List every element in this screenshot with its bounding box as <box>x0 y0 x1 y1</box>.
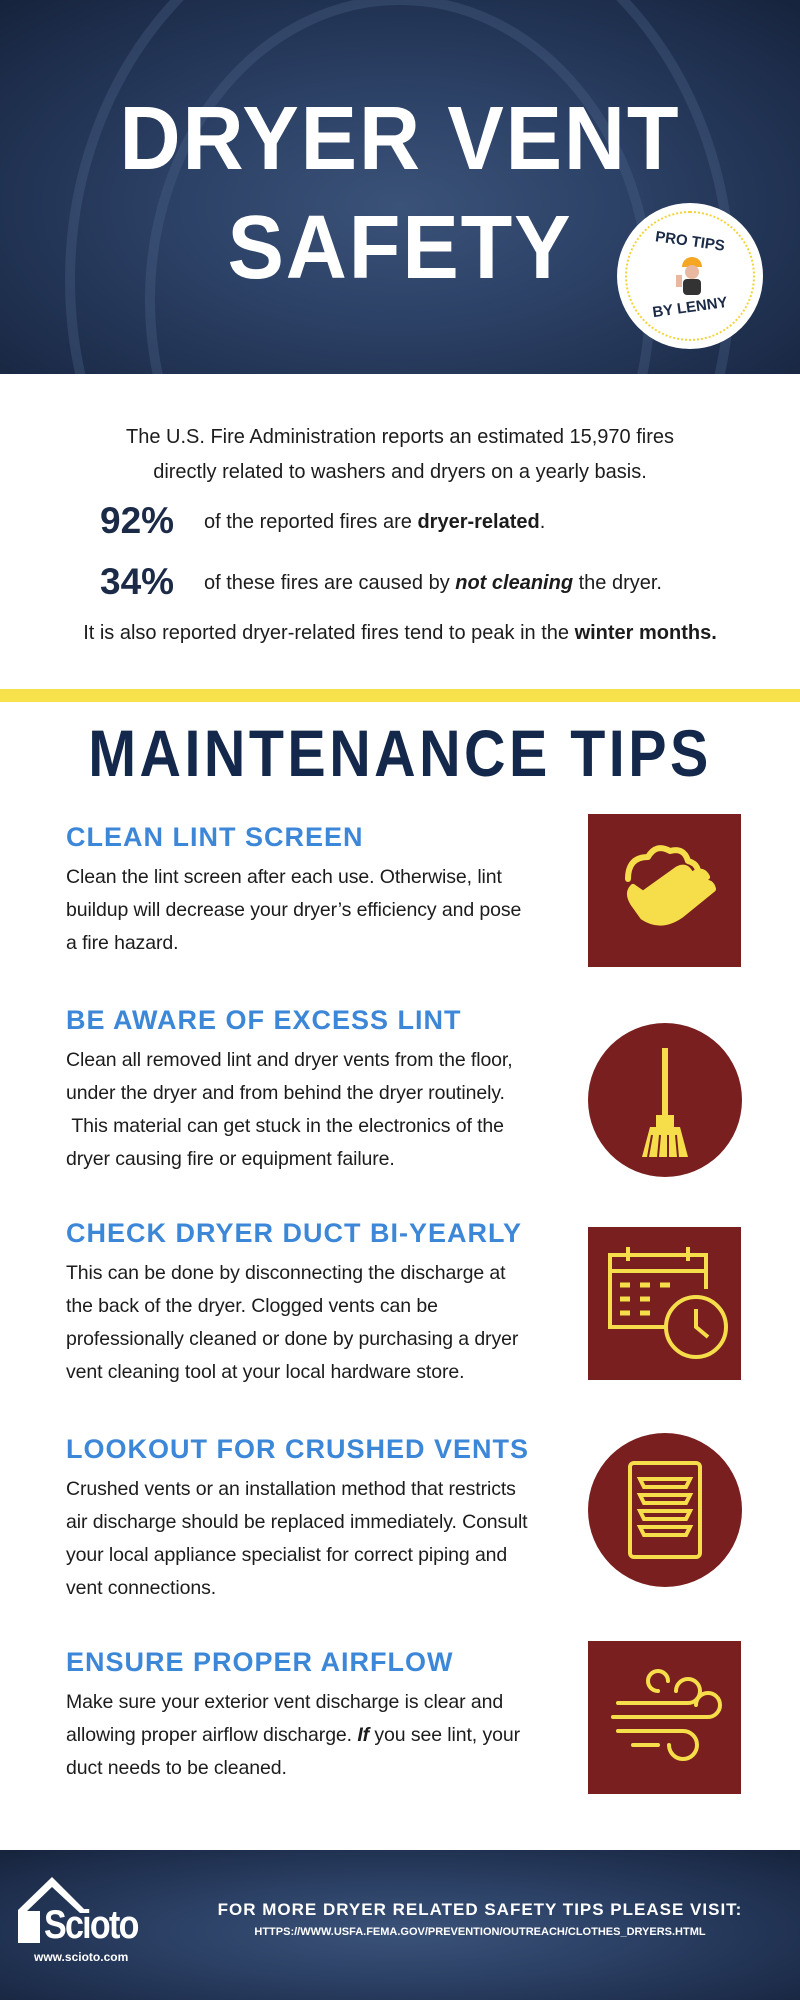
header banner <box>0 0 800 374</box>
tip 1: CLEAN LINT SCREEN <box>66 822 364 852</box>
icon: wind <box>588 1641 741 1794</box>
tip 1: Clean the lint screen after each use. Otherwise, lint <box>66 866 502 888</box>
tip 3: the back of the dryer. Clogged vents can be <box>66 1295 438 1317</box>
winter note: It is also reported dryer-related fires tend to peak in the winter months. <box>83 622 717 644</box>
tip 1: buildup will decrease your dryer’s efficiency and pose <box>66 899 521 921</box>
intro statement: directly related to washers and dryers on a yearly basis. <box>153 461 647 483</box>
logo: scioto: Scioto <box>44 1903 138 1947</box>
tip 5: duct needs to be cleaned. <box>66 1757 287 1779</box>
badge: pro tips by lenny: BY LENNY <box>651 294 729 321</box>
icon: hand wiping <box>588 814 741 967</box>
tip 5: ENSURE PROPER AIRFLOW <box>66 1647 454 1677</box>
logo: scioto <box>18 1877 138 1964</box>
tip 3: This can be done by disconnecting the discharge at <box>66 1262 505 1284</box>
icon: vent grille <box>588 1433 742 1587</box>
tip 3: CHECK DRYER DUCT BI-YEARLY <box>66 1218 522 1248</box>
tip 5: Make sure your exterior vent discharge is clear and <box>66 1691 503 1713</box>
stat: 92%: 92% <box>100 500 174 541</box>
tip 2: BE AWARE OF EXCESS LINT <box>66 1005 462 1035</box>
tip 5 <box>66 1647 520 1779</box>
tip 4: your local appliance specialist for correct piping and <box>66 1544 507 1566</box>
stat: 34%: of these fires are caused by not cleaning the dryer. <box>204 572 662 594</box>
tip 5: allowing proper airflow discharge. If you see lint, your <box>66 1724 520 1746</box>
tip 2: This material can get stuck in the electronics of the <box>71 1115 504 1137</box>
footer call to action: FOR MORE DRYER RELATED SAFETY TIPS PLEASE VISIT: <box>218 1900 742 1919</box>
intro statement <box>126 426 674 483</box>
icon: broom <box>588 1023 742 1177</box>
tip 4: LOOKOUT FOR CRUSHED VENTS <box>66 1434 529 1464</box>
tip 3: professionally cleaned or done by purchasing a dryer <box>66 1328 518 1350</box>
footer <box>0 1850 800 2000</box>
section heading: maintenance tips: MAINTENANCE TIPS <box>88 716 712 790</box>
badge: pro tips by lenny <box>617 203 763 349</box>
title <box>120 89 680 298</box>
title: DRYER VENT <box>120 89 680 189</box>
stat: 34%: 34% <box>100 561 174 602</box>
stat: 34% <box>100 561 662 602</box>
tip 2 <box>66 1005 513 1170</box>
tip 2: dryer causing fire or equipment failure. <box>66 1148 395 1170</box>
icon: calendar clock <box>588 1227 741 1380</box>
title: SAFETY <box>227 198 573 298</box>
stat: 92%: of the reported fires are dryer-related. <box>204 511 545 533</box>
tip 4: air discharge should be replaced immediately. Consult <box>66 1511 528 1533</box>
intro statement: The U.S. Fire Administration reports an estimated 15,970 fires <box>126 426 674 448</box>
tip 1 <box>66 822 521 954</box>
badge: pro tips by lenny: PRO TIPS <box>654 228 726 255</box>
tip 1: a fire hazard. <box>66 932 178 954</box>
tip 4: Crushed vents or an installation method that restricts <box>66 1478 516 1500</box>
footer call to action <box>218 1900 742 1938</box>
stat: 92% <box>100 500 545 541</box>
logo: scioto: www.scioto.com <box>34 1950 128 1964</box>
tip 3 <box>66 1218 522 1383</box>
footer call to action: HTTPS://WWW.USFA.FEMA.GOV/PREVENTION/OUTREACH/CLOTHES_DRYERS.HTML <box>254 1926 706 1938</box>
tip 2: under the dryer and from behind the dryer routinely. <box>66 1082 505 1104</box>
tip 4: vent connections. <box>66 1577 216 1599</box>
tip 4 <box>66 1434 529 1599</box>
tip 2: Clean all removed lint and dryer vents from the floor, <box>66 1049 513 1071</box>
tip 3: vent cleaning tool at your local hardware store. <box>66 1361 464 1383</box>
